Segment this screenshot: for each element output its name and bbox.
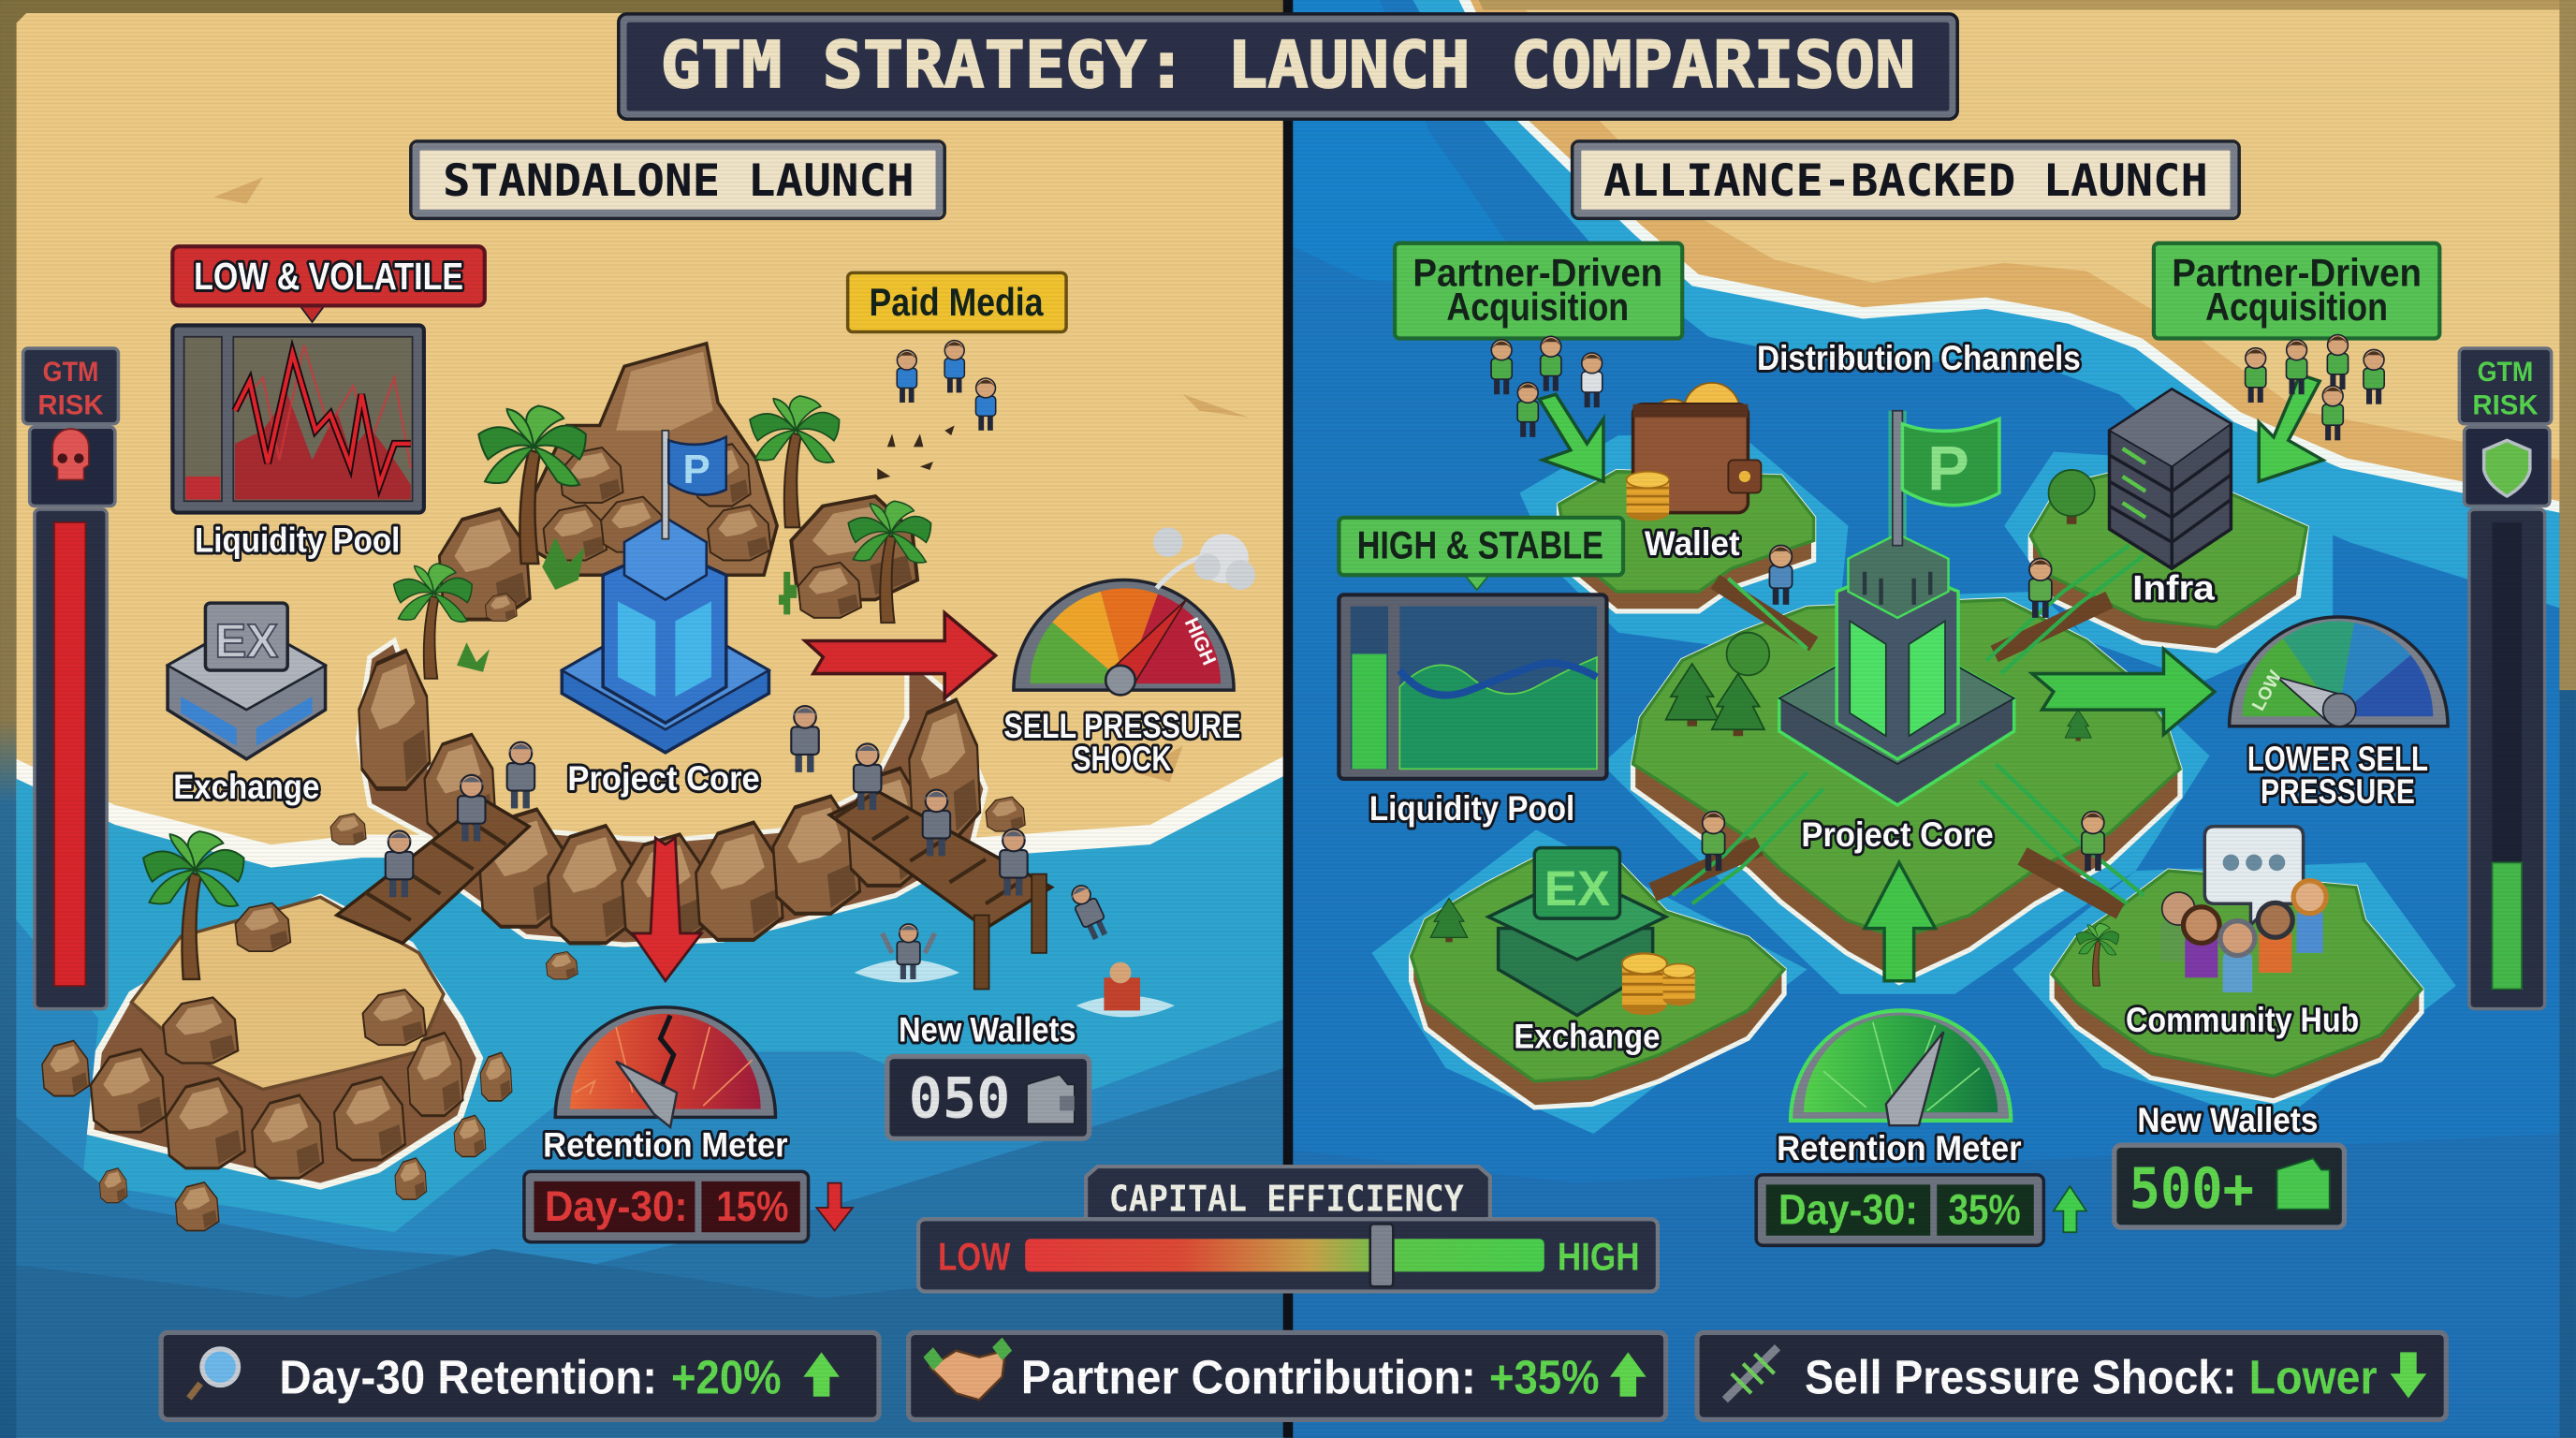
icon: project core tower standalone	[562, 431, 768, 753]
label: exchange: Exchange	[173, 768, 319, 806]
icon: exchange building standalone: EX	[214, 614, 278, 668]
rocky mound and palms	[394, 344, 931, 679]
gauge: retention meter alliance	[1791, 1010, 2011, 1125]
callout: low and volatile: LOW & VOLATILE	[194, 255, 463, 298]
readout: day-30 35 percent	[1756, 1175, 2043, 1245]
capital efficiency meter	[918, 1167, 1658, 1291]
icon: community speech bubble and people	[2076, 827, 2326, 992]
bridges: standalone	[337, 792, 1051, 990]
center divider	[1283, 0, 1293, 1438]
arrow: red to sell pressure	[805, 613, 996, 698]
tree: infra	[2049, 470, 2095, 524]
label: sell pressure shock: SELL PRESSURE	[1003, 707, 1240, 745]
label: new wallets alliance: New Wallets	[2137, 1101, 2318, 1139]
gauge: sell pressure shock: HIGH	[1180, 615, 1220, 668]
heading: alliance-backed launch: ALLIANCE-BACKED LAUNCH	[1603, 155, 2208, 207]
counter: new wallets 500+: 500+	[2130, 1157, 2254, 1222]
callout: partner-driven right	[2154, 243, 2439, 339]
callout: paid media	[848, 272, 1066, 332]
counter: new wallets 500+	[2115, 1145, 2344, 1227]
counter: new wallets 050	[887, 1056, 1090, 1138]
label: project core right: Project Core	[1801, 815, 1994, 854]
gauge bar: left gtm risk: RISK	[37, 389, 104, 420]
icon: green project core tower: P	[1927, 434, 1969, 504]
label: new wallets standalone: New Wallets	[899, 1011, 1076, 1049]
gauge: lower sell pressure: LOW	[2249, 668, 2287, 714]
label: liquidity pool alliance: Liquidity Pool	[1369, 789, 1574, 828]
title banner	[619, 14, 1957, 119]
icon: magnifier	[189, 1349, 239, 1399]
people: leaving wallets	[386, 706, 1175, 1017]
icon: project core tower standalone: P	[683, 447, 710, 492]
stat bar: sell pressure shock: Sell Pressure Shock:	[1805, 1350, 2237, 1403]
stat bar: partner contribution: Partner Contribution:	[1021, 1350, 1476, 1403]
label: community hub: Community Hub	[2126, 1001, 2359, 1039]
icon: down arrow small red	[816, 1183, 853, 1231]
callout: high and stable	[1339, 518, 1623, 590]
heading: standalone launch: STANDALONE LAUNCH	[443, 155, 915, 207]
capital efficiency meter: CAPITAL EFFICIENCY	[1109, 1178, 1464, 1220]
people: partner right with arrow	[2246, 335, 2384, 481]
island: wallet	[1559, 472, 1814, 611]
stat bar: day-30 retention: +20%	[671, 1350, 782, 1403]
island: exchange	[1412, 855, 1784, 1108]
chart: liquidity pool alliance	[1339, 594, 1606, 779]
label: wallet: Wallet	[1645, 524, 1740, 563]
gauge: retention meter standalone	[555, 1007, 775, 1127]
gauge bar: left gtm risk: GTM	[43, 357, 98, 388]
label: infra: Infra	[2132, 569, 2215, 608]
arrow: red down to retention	[633, 838, 701, 981]
stat bar: partner contribution	[909, 1332, 1666, 1419]
stat bar: partner contribution: +35%	[1489, 1350, 1600, 1403]
readout: day-30 15 percent: 15%	[716, 1182, 788, 1230]
icon: exchange building standalone	[168, 603, 326, 759]
arrow: green to lower sell pressure	[2032, 649, 2215, 734]
gauge bar: right gtm risk	[2459, 348, 2552, 1009]
icon: spring	[1725, 1347, 1778, 1400]
label: distribution channels: Distribution Channels	[1757, 339, 2081, 377]
label: shock: SHOCK	[1073, 740, 1172, 778]
label: project core: Project Core	[567, 759, 760, 798]
capital efficiency meter: HIGH	[1558, 1235, 1640, 1279]
icon: green exchange: EX	[1544, 861, 1610, 917]
icon: handshake	[923, 1338, 1012, 1400]
heading: standalone launch	[411, 141, 944, 218]
label: retention meter standalone: Retention Meter	[543, 1126, 788, 1165]
bridges and pipes: alliance	[1653, 546, 2144, 910]
people: paid media arrivals	[877, 341, 996, 479]
gauge bar: left gtm risk	[23, 348, 118, 1009]
readout: day-30 35 percent: 35%	[1949, 1185, 2021, 1233]
panel: alliance island background	[1293, 0, 2576, 1438]
callout: partner-driven left	[1395, 243, 1682, 339]
readout: day-30 15 percent: Day-30:	[545, 1182, 688, 1230]
stat bar: sell pressure shock	[1697, 1332, 2446, 1419]
gauge: sell pressure shock	[1014, 527, 1255, 695]
arrow: green up to core	[1865, 862, 1935, 981]
callout: low and volatile	[172, 246, 485, 322]
callout: partner-driven left: Acquisition	[1446, 285, 1629, 329]
label: lower sell pressure: LOWER SELL	[2247, 740, 2428, 778]
chart: liquidity pool standalone	[172, 325, 424, 513]
icon: up arrow small green	[2054, 1186, 2086, 1232]
readout: day-30 35 percent: Day-30:	[1778, 1185, 1918, 1233]
panel: standalone island background	[17, 13, 1284, 1438]
icon: green exchange	[1430, 848, 1695, 1016]
callout: partner-driven left: Partner-Driven	[1412, 250, 1662, 294]
icon: server stack infra	[2110, 389, 2231, 568]
callout: partner-driven right: Partner-Driven	[2172, 250, 2422, 294]
stat bar: sell pressure shock: Lower	[2249, 1350, 2378, 1403]
callout: paid media: Paid Media	[869, 280, 1044, 324]
gauge: lower sell pressure	[2230, 617, 2448, 726]
icon: wallet	[1627, 383, 1761, 521]
gauge bar: right gtm risk: RISK	[2472, 389, 2539, 420]
stat bar: day-30 retention	[161, 1332, 879, 1419]
label: retention meter alliance: Retention Meter	[1777, 1129, 2022, 1167]
callout: high and stable: HIGH & STABLE	[1357, 523, 1603, 567]
teal halos: alliance	[1372, 435, 2456, 1134]
label: pressure: PRESSURE	[2261, 772, 2415, 811]
island: community	[2052, 871, 2422, 1101]
label: exchange right: Exchange	[1514, 1018, 1661, 1056]
people: partner left with arrow	[1491, 336, 1603, 481]
stat bar: day-30 retention: Day-30 Retention:	[279, 1350, 657, 1403]
big island: standalone	[330, 640, 1025, 979]
icon: green project core tower	[1779, 411, 2014, 805]
counter: new wallets 050: 050	[909, 1066, 1010, 1131]
label: liquidity pool: Liquidity Pool	[195, 521, 400, 560]
island: infra	[2030, 468, 2306, 651]
small island: standalone	[42, 831, 512, 1231]
heading: alliance-backed launch	[1573, 141, 2239, 218]
readout: day-30 15 percent	[524, 1171, 809, 1242]
callout: partner-driven right: Acquisition	[2205, 285, 2388, 329]
gauge bar: right gtm risk: GTM	[2478, 357, 2533, 388]
title banner: GTM STRATEGY: LAUNCH COMPARISON	[661, 28, 1915, 103]
island: project core main	[1633, 600, 2180, 983]
people: alliance bridges	[1702, 545, 2104, 871]
capital efficiency meter: LOW	[938, 1235, 1011, 1279]
